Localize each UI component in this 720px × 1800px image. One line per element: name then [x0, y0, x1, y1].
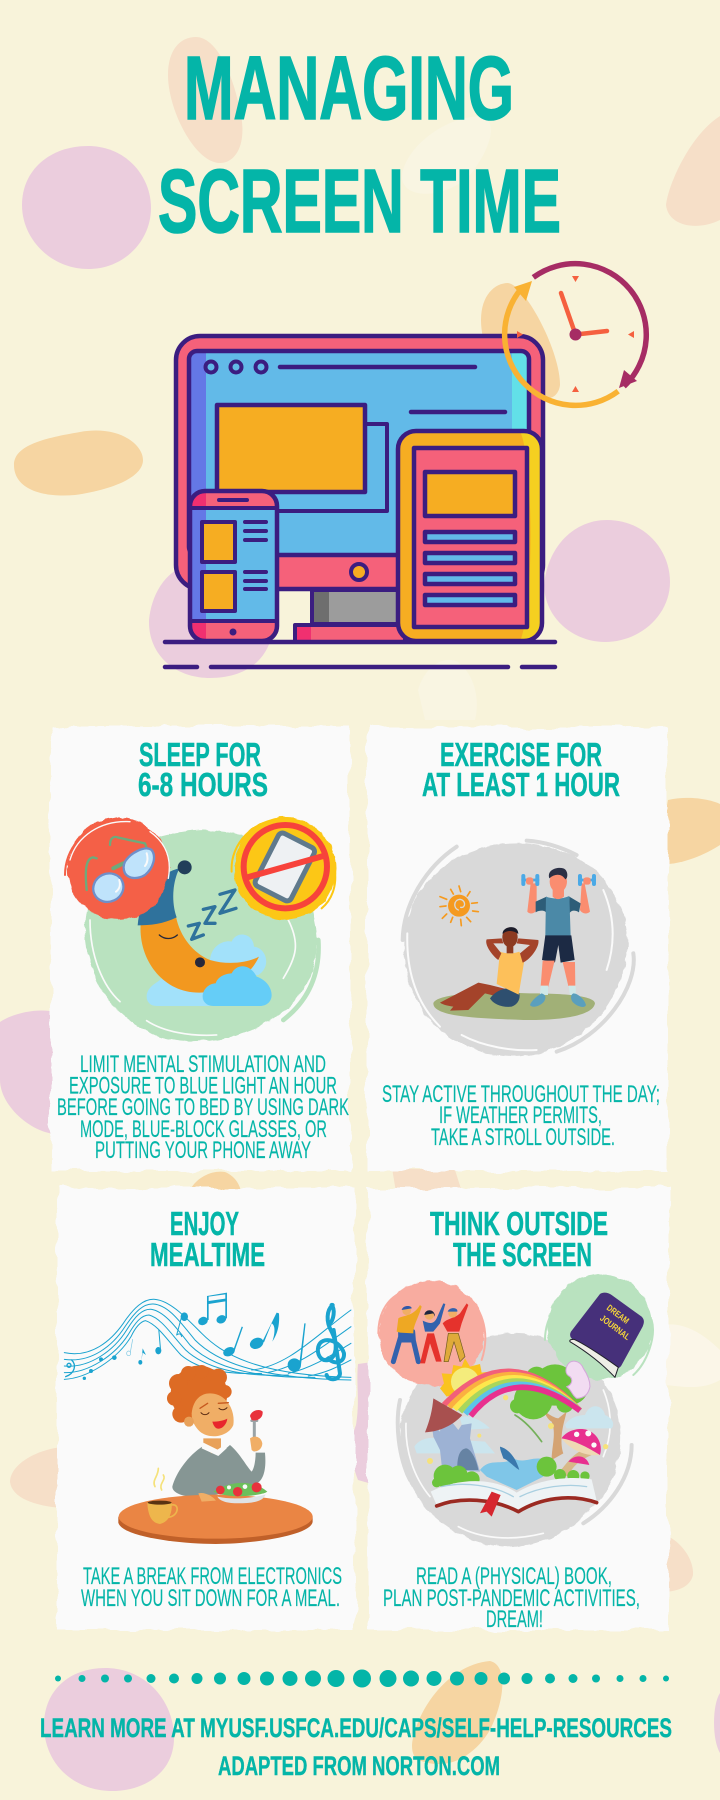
icon: castle tower — [425, 1398, 480, 1472]
clouds — [414, 1406, 613, 1453]
panel: mealtime — [57, 1188, 355, 1630]
heading: sleep — [138, 736, 268, 803]
icon: dancers badge — [378, 1281, 485, 1386]
body text: mealtime: TAKE A BREAK FROM ELECTRONICS — [83, 1563, 342, 1590]
title: MANAGING — [184, 39, 514, 139]
open book — [431, 1478, 597, 1517]
tablet — [398, 431, 542, 641]
icon: sun — [440, 1358, 490, 1397]
hair — [167, 1365, 232, 1423]
body text: sleep: PUTTING YOUR PHONE AWAY — [95, 1137, 311, 1164]
figure: sitting person — [440, 927, 539, 1011]
icon: glasses badge — [65, 817, 169, 919]
clock — [505, 264, 646, 405]
body text: exercise: IF WEATHER PERMITS, — [439, 1102, 602, 1129]
heading: sleep: 6-8 HOURS — [138, 766, 268, 803]
body text: sleep: LIMIT MENTAL STIMULATION AND — [80, 1051, 326, 1078]
illustration: person eating with music — [64, 1293, 351, 1544]
body text: sleep — [57, 1051, 349, 1164]
heading: think: THE SCREEN — [453, 1236, 592, 1273]
icon: dream journal badge: DREAM — [605, 1303, 631, 1326]
illustration: two people exercising — [403, 841, 634, 1057]
brush circle — [398, 1333, 632, 1547]
icon: zzz — [188, 890, 236, 939]
footer text — [40, 1713, 672, 1781]
icon: moon with cap — [138, 860, 259, 993]
monitor — [176, 336, 543, 642]
icon: cloud back — [210, 935, 266, 975]
icon: mushrooms — [558, 1429, 601, 1477]
illustration: moon, glasses, crossed-out phone — [65, 817, 336, 1042]
body text: think: DREAM! — [486, 1606, 543, 1633]
heading: mealtime — [150, 1205, 265, 1273]
body text: mealtime — [81, 1563, 342, 1612]
grass — [433, 993, 595, 1020]
icon: dream journal badge: JOURNAL — [598, 1313, 632, 1342]
body text: sleep: MODE, BLUE-BLOCK GLASSES, OR — [80, 1116, 327, 1143]
icon: sun — [440, 886, 478, 926]
illustration: book, dancers, dream journal — [378, 1274, 653, 1547]
illustration: devices — [165, 264, 646, 667]
panel: think outside the screen — [368, 1188, 668, 1633]
table — [118, 1495, 313, 1544]
figure: standing man with dumbbells — [523, 868, 595, 1007]
tree — [510, 1364, 588, 1460]
title — [158, 39, 561, 252]
icon: unicorn — [566, 1361, 590, 1398]
footer text: ADAPTED FROM NORTON.COM — [218, 1751, 500, 1781]
icon: coffee cup — [147, 1468, 177, 1524]
dancer 2 — [420, 1333, 442, 1363]
heading: sleep: SLEEP FOR — [139, 736, 261, 773]
ground lines — [165, 642, 555, 667]
icon: salad bowl — [198, 1482, 267, 1503]
heading: exercise: EXERCISE FOR — [440, 736, 602, 773]
body text: think — [383, 1563, 640, 1633]
bushes — [432, 1457, 590, 1487]
icon: dream journal badge — [545, 1274, 653, 1379]
heading: think — [430, 1205, 608, 1273]
body text: sleep: BEFORE GOING TO BED BY USING DARK — [57, 1094, 349, 1121]
icon: crossed-out phone badge — [232, 817, 336, 919]
phone — [190, 491, 277, 641]
panel: sleep — [51, 726, 350, 1171]
water and dolphin — [480, 1447, 550, 1490]
panel: exercise — [367, 727, 668, 1171]
icon: cloud front — [203, 966, 272, 1006]
heading: exercise: AT LEAST 1 HOUR — [422, 766, 620, 803]
heading: think: THINK OUTSIDE — [430, 1205, 608, 1242]
stars — [427, 1395, 608, 1464]
heading: mealtime: ENJOY — [170, 1205, 239, 1242]
heading: exercise — [422, 736, 620, 803]
music staff and notes — [64, 1293, 351, 1380]
figure: person — [167, 1365, 265, 1497]
dotted divider — [55, 1670, 669, 1688]
body text: mealtime: WHEN YOU SIT DOWN FOR A MEAL. — [81, 1585, 340, 1612]
body text: sleep: EXPOSURE TO BLUE LIGHT AN HOUR — [69, 1072, 337, 1100]
brush circle — [403, 841, 634, 1057]
body text: exercise — [382, 1081, 660, 1151]
dancer 1 — [393, 1332, 418, 1362]
dancer 3 — [444, 1333, 465, 1362]
heading: mealtime: MEALTIME — [150, 1236, 265, 1273]
rainbow — [444, 1371, 580, 1416]
